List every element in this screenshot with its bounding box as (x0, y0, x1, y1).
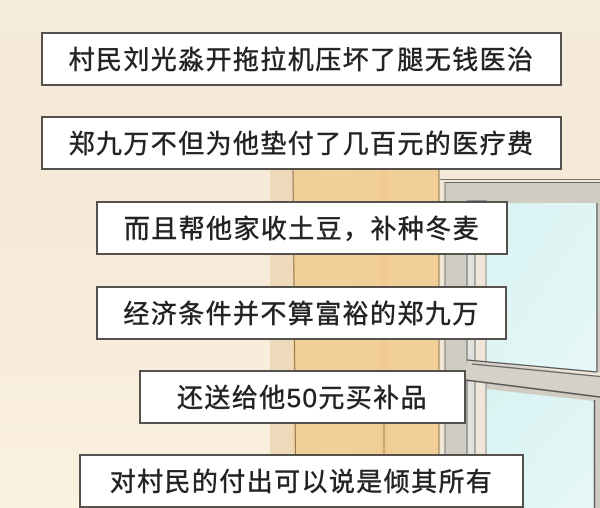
caption box 6 (79, 454, 524, 508)
caption box 4 (96, 286, 507, 340)
caption box 5: 还送给他50元买补品 (177, 383, 428, 413)
caption box 3: 而且帮他家收土豆，补种冬麦 (124, 214, 480, 244)
lower glass (486, 389, 594, 508)
door shadow (270, 170, 294, 508)
caption box 6: 对村民的付出可以说是倾其所有 (110, 467, 493, 497)
caption box 5 (139, 370, 466, 424)
caption box 2: 郑九万不但为他垫付了几百元的医疗费 (69, 129, 534, 159)
upper glass (486, 203, 596, 372)
caption box 1 (41, 32, 562, 86)
window jamb (467, 201, 474, 508)
caption box 4: 经济条件并不算富裕的郑九万 (123, 299, 480, 329)
wooden door (293, 170, 439, 508)
window (440, 179, 600, 508)
caption box 2 (41, 116, 562, 170)
middle window bar (465, 360, 600, 397)
caption box 3 (96, 201, 508, 255)
caption box 1: 村民刘光淼开拖拉机压坏了腿无钱医治 (69, 45, 534, 75)
